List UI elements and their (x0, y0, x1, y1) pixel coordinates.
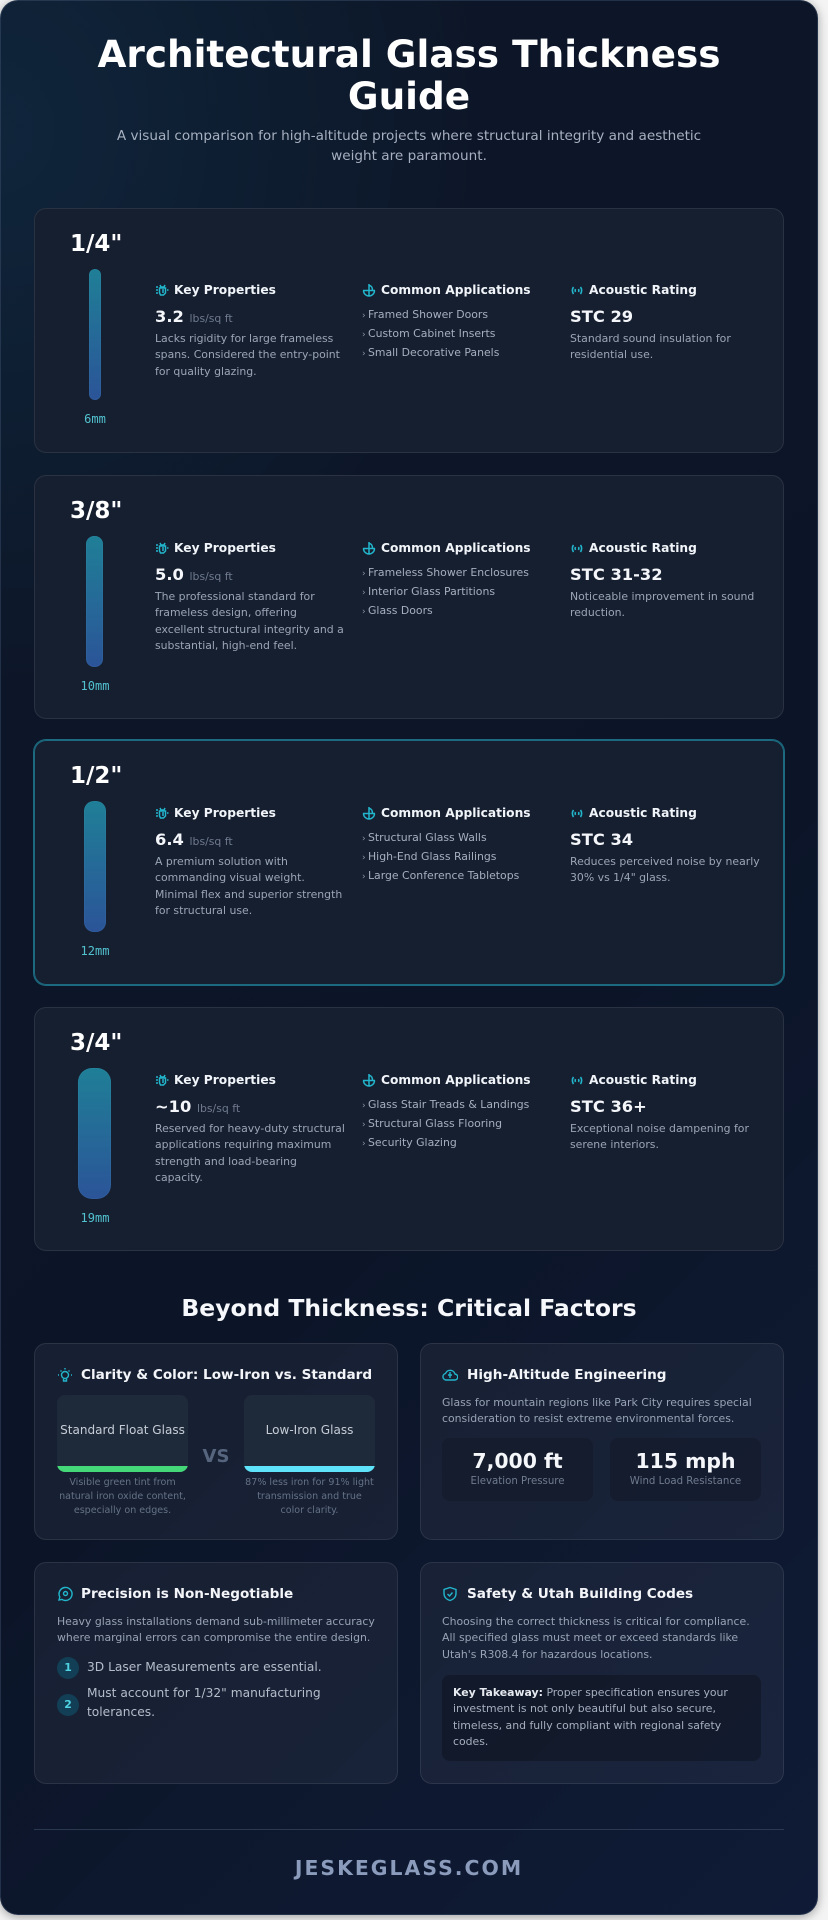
heading: Key Properties (174, 806, 276, 820)
icon: applications (362, 542, 376, 555)
low-iron glass caption: 87% less iron for 91% light (245, 1477, 374, 1488)
heading: Key Properties (174, 541, 276, 555)
heading: Key Properties (174, 283, 276, 297)
description: frameless design, offering (155, 606, 297, 619)
panel: high-altitude engineering (420, 1343, 784, 1540)
panel title: Safety & Utah Building Codes (467, 1586, 693, 1602)
heading: Common Applications (381, 541, 531, 555)
column: common applications (362, 1073, 531, 1148)
description: spans. Considered the entry-point (155, 348, 340, 361)
subtitle: weight are paramount. (331, 148, 487, 164)
stat value: 115 mph (635, 1449, 736, 1473)
heading: Common Applications (381, 806, 531, 820)
title (97, 32, 721, 118)
step 1 number (57, 1657, 79, 1679)
panel text: Choosing the correct thickness is critical for compliance. (442, 1615, 750, 1628)
weight value: 6.4 lbs/sq ft (155, 830, 233, 849)
standard glass caption (57, 1476, 188, 1517)
description: Reserved for heavy-duty structural (155, 1122, 345, 1135)
application list: › (362, 606, 366, 616)
key takeaway callout: codes. (453, 1735, 488, 1748)
panel: precision (34, 1562, 398, 1784)
key takeaway callout (442, 1675, 761, 1761)
icon: applications (362, 807, 376, 820)
panel: 1/4 inch glass (34, 208, 784, 453)
weight value: ~10 lbs/sq ft (155, 1097, 240, 1116)
thickness label: 3/8" (70, 498, 122, 524)
low-iron glass caption: transmission and true (257, 1491, 362, 1502)
description: serene interiors. (570, 1138, 659, 1151)
weight value: 5.0 lbs/sq ft (155, 565, 233, 584)
heading: Acoustic Rating (589, 541, 697, 555)
step 2 text: tolerances. (87, 1705, 155, 1719)
application list: Security Glazing (368, 1136, 457, 1148)
glass bar: 6mm (89, 269, 101, 400)
standard glass sample (57, 1395, 188, 1472)
key takeaway callout: investment is not only beautiful but also secure, (453, 1702, 716, 1715)
icon: light bulb (57, 1367, 73, 1383)
subtitle (117, 128, 701, 164)
description: A premium solution with (155, 855, 288, 868)
stat label: Elevation Pressure (470, 1476, 565, 1487)
title: Guide (348, 74, 470, 118)
application list: Structural Glass Flooring (368, 1116, 502, 1130)
description (570, 855, 760, 884)
description (570, 332, 731, 361)
standard glass caption: especially on edges. (74, 1504, 171, 1516)
description (570, 1121, 749, 1154)
application list: Glass Doors (368, 604, 433, 616)
step 1 text: 3D Laser Measurements are essential. (87, 1660, 322, 1674)
application list (362, 566, 529, 616)
weight value: 3.2 lbs/sq ft (155, 307, 233, 326)
glass bar: 10mm (86, 536, 103, 667)
column: key properties (154, 541, 344, 652)
panel: safety and building codes (420, 1562, 784, 1784)
description: reduction. (570, 606, 625, 619)
description (570, 590, 754, 619)
column: acoustic rating (570, 806, 760, 884)
column: acoustic rating (570, 541, 754, 619)
description: for quality glazing. (155, 365, 257, 378)
description (154, 590, 344, 652)
stat label: Wind Load Resistance (630, 1476, 741, 1487)
icon: acoustic (572, 544, 582, 552)
icon: key properties (156, 808, 168, 819)
icon: applications (362, 1074, 376, 1087)
application list: Glass Stair Treads & Landings (368, 1098, 529, 1110)
application list: Framed Shower Doors (368, 308, 488, 320)
STC value: STC 31-32 (570, 565, 663, 584)
application list: › (362, 310, 366, 320)
application list: › (362, 1138, 366, 1148)
step 2 number (57, 1694, 79, 1716)
heading: Common Applications (381, 283, 531, 297)
low-iron glass caption (244, 1476, 375, 1517)
panel text: Glass for mountain regions like Park City requires special (442, 1396, 752, 1409)
stat: elevation (442, 1438, 593, 1501)
application list: › (362, 1100, 366, 1110)
vs label: VS (203, 1446, 229, 1467)
panel title: High-Altitude Engineering (467, 1367, 667, 1383)
subtitle: A visual comparison for high-altitude projects where structural integrity and aesthetic (117, 128, 701, 144)
STC value: STC 36+ (570, 1097, 647, 1116)
description: residential use. (570, 348, 653, 361)
description: Exceptional noise dampening for (570, 1122, 749, 1135)
column: common applications (362, 541, 531, 616)
panel: clarity and color (34, 1343, 398, 1540)
icon: target speech bubble (57, 1586, 73, 1602)
application list: Structural Glass Walls (368, 830, 487, 844)
low-iron glass caption: color clarity. (281, 1504, 338, 1516)
heading: Acoustic Rating (589, 283, 697, 297)
panel: 1/2 inch glass (highlighted) (34, 740, 784, 985)
description: 30% vs 1/4" glass. (570, 871, 671, 884)
panel: 3/4 inch glass (34, 1007, 784, 1251)
heading: Common Applications (381, 1073, 531, 1087)
column: acoustic rating (570, 1073, 749, 1151)
glass bar: 19mm (78, 1068, 111, 1199)
description: commanding visual weight. (155, 871, 305, 884)
section heading: Beyond Thickness: Critical Factors (181, 1294, 637, 1322)
stat value: 7,000 ft (472, 1449, 563, 1473)
application list (362, 830, 519, 882)
column: acoustic rating (570, 283, 731, 361)
standard glass caption: Visible green tint from (69, 1477, 176, 1488)
footer brand: JESKEGLASS.COM (295, 1856, 523, 1880)
application list: › (362, 1120, 366, 1130)
STC value: STC 34 (570, 830, 633, 849)
key takeaway callout: timeless, and fully compliant with regional safety (453, 1719, 721, 1732)
heading: Key Properties (174, 1073, 276, 1087)
icon: key properties (156, 284, 168, 296)
thickness label: 1/2" (70, 763, 122, 789)
panel text: All specified glass must meet or exceed standards like (442, 1631, 738, 1644)
column: key properties (155, 1073, 345, 1184)
thickness label: 3/4" (70, 1030, 122, 1056)
column: common applications (362, 283, 531, 358)
application list: Frameless Shower Enclosures (368, 566, 529, 578)
description: capacity. (155, 1171, 203, 1184)
description: strength and load-bearing (155, 1155, 297, 1168)
millimetre label: 6mm (84, 412, 106, 426)
glass bar: 12mm (84, 801, 106, 932)
icon: acoustic (572, 810, 582, 818)
application list: Interior Glass Partitions (368, 584, 495, 598)
millimetre label: 12mm (81, 944, 109, 958)
description: applications requiring maximum (155, 1138, 331, 1151)
icon: key properties (156, 542, 168, 554)
column: key properties (155, 806, 342, 917)
low-iron glass sample: Low-Iron Glass (266, 1423, 353, 1437)
application list: Small Decorative Panels (368, 346, 499, 358)
panel text: Heavy glass installations demand sub-millimeter accuracy (57, 1615, 375, 1628)
heading: Acoustic Rating (589, 1073, 697, 1087)
description (155, 1122, 345, 1184)
description: The professional standard for (155, 590, 315, 603)
millimetre label: 19mm (81, 1211, 109, 1225)
description: Noticeable improvement in sound (570, 590, 754, 603)
panel text: Utah's R308.4 for hazardous locations. (442, 1648, 653, 1661)
standard glass sample: Standard Float Glass (60, 1423, 185, 1437)
step 2 number: 2 (64, 1698, 72, 1711)
application list (362, 1098, 529, 1148)
footer divider (34, 1828, 784, 1830)
icon: cloud (442, 1367, 458, 1383)
application list (362, 308, 499, 358)
column: common applications (362, 806, 531, 882)
icon: applications (362, 284, 376, 297)
millimetre label: 10mm (81, 679, 109, 693)
description: excellent structural integrity and a (155, 623, 344, 636)
STC value: STC 29 (570, 307, 633, 326)
application list: High-End Glass Railings (368, 850, 496, 862)
description: Standard sound insulation for (570, 332, 731, 345)
application list: › (362, 348, 366, 358)
description: Reduces perceived noise by nearly (570, 855, 760, 868)
step 2 text: Must account for 1/32" manufacturing (87, 1686, 321, 1700)
application list: Large Conference Tabletops (368, 868, 519, 882)
icon: key properties (156, 1074, 168, 1086)
icon: acoustic (572, 286, 582, 294)
stat: wind load (610, 1438, 761, 1501)
application list: › (362, 852, 366, 862)
panel title: Precision is Non-Negotiable (81, 1586, 293, 1602)
panel title: Clarity & Color: Low-Iron vs. Standard (81, 1367, 372, 1383)
panel text: consideration to resist extreme environmental forces. (442, 1412, 734, 1425)
description: for structural use. (155, 904, 252, 917)
standard glass caption: natural iron oxide content, (59, 1491, 186, 1502)
heading: Acoustic Rating (589, 806, 697, 820)
column: key properties (155, 283, 340, 378)
panel text (442, 1395, 752, 1428)
panel: 3/8 inch glass (34, 475, 784, 719)
application list: › (362, 872, 366, 882)
application list: › (362, 330, 366, 340)
panel text (57, 1614, 375, 1647)
title: Architectural Glass Thickness (97, 32, 721, 76)
icon: acoustic (570, 1073, 584, 1087)
key takeaway callout: Key Takeaway: Proper specification ensures your (453, 1686, 728, 1699)
application list: › (362, 834, 366, 844)
step 1 number: 1 (64, 1661, 72, 1674)
description: substantial, high-end feel. (155, 639, 297, 652)
thickness label: 1/4" (70, 231, 122, 257)
application list: › (362, 568, 366, 578)
panel text: where marginal errors can compromise the entire design. (57, 1631, 370, 1644)
application list: › (362, 588, 366, 598)
panel text (442, 1614, 750, 1663)
description: Lacks rigidity for large frameless (155, 332, 333, 345)
description (155, 332, 340, 378)
application list: Custom Cabinet Inserts (368, 326, 495, 340)
step 2 text (87, 1684, 321, 1722)
description: Minimal flex and superior strength (155, 888, 342, 901)
low-iron glass sample (244, 1395, 375, 1472)
icon: shield (442, 1586, 458, 1602)
description (155, 855, 342, 917)
